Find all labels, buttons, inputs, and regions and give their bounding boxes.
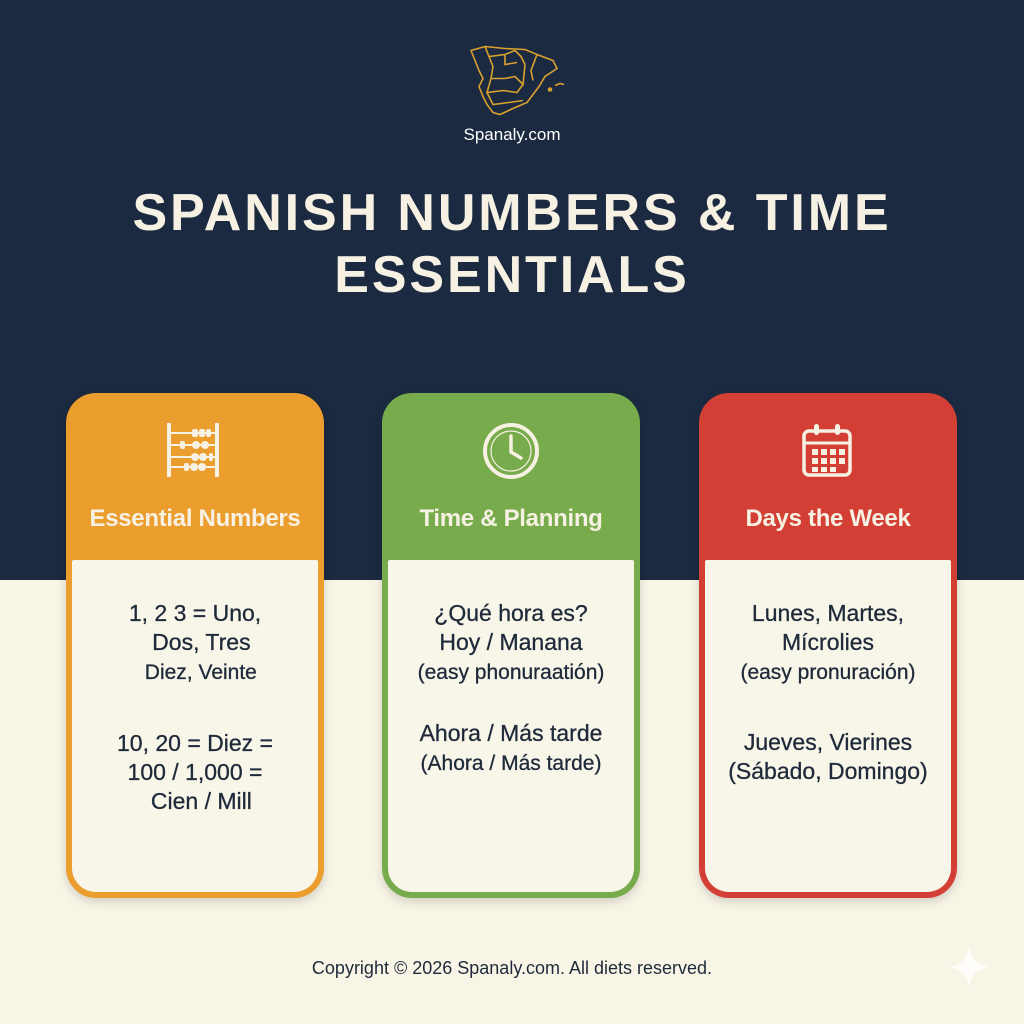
text block: Mícrolies [782,629,874,655]
heading: Days the Week [745,505,911,532]
text block: 100 / 1,000 = [128,759,262,785]
text block: ¿Qué hora es? [434,600,588,626]
panel: essential numbers [66,393,324,898]
title: ESSENTIALS [334,246,690,304]
text block: Dos, Tres [152,629,251,655]
text block: Lunes, Martes, [752,600,904,626]
text block: (Ahora / Más tarde) [421,752,601,775]
panel: time & planning [382,393,640,898]
text block [388,560,634,892]
panel: days of the week [699,393,957,898]
brand text: Spanaly.com [463,125,560,144]
text block: (Sábado, Domingo) [728,758,928,784]
heading: Essential Numbers [90,505,300,532]
text block: Ahora / Más tarde [420,720,602,746]
text block: Hoy / Manana [439,629,583,655]
title: SPANISH NUMBERS & TIME [132,184,892,242]
text block [705,560,951,892]
text block: 10, 20 = Diez = [117,730,273,756]
heading: Time & Planning [419,505,603,532]
text block: Cien / Mill [151,788,252,814]
text block: Diez, Veinte [145,661,257,684]
icon: abacus [167,423,219,477]
text block: (easy pronuración) [740,661,916,684]
text block: (easy phonuraatión) [418,661,604,684]
icon: calendar [802,424,852,477]
footer: Copyright © 2026 Spanaly.com. All diets reserved. [312,958,712,978]
text block: 1, 2 3 = Uno, [129,600,261,626]
icon: clock [483,423,539,479]
icon: sparkle [949,948,989,987]
text block [72,560,318,892]
logo: map of Spain [470,46,564,116]
text block: Jueves, Vierines [744,729,912,755]
title [132,184,892,304]
